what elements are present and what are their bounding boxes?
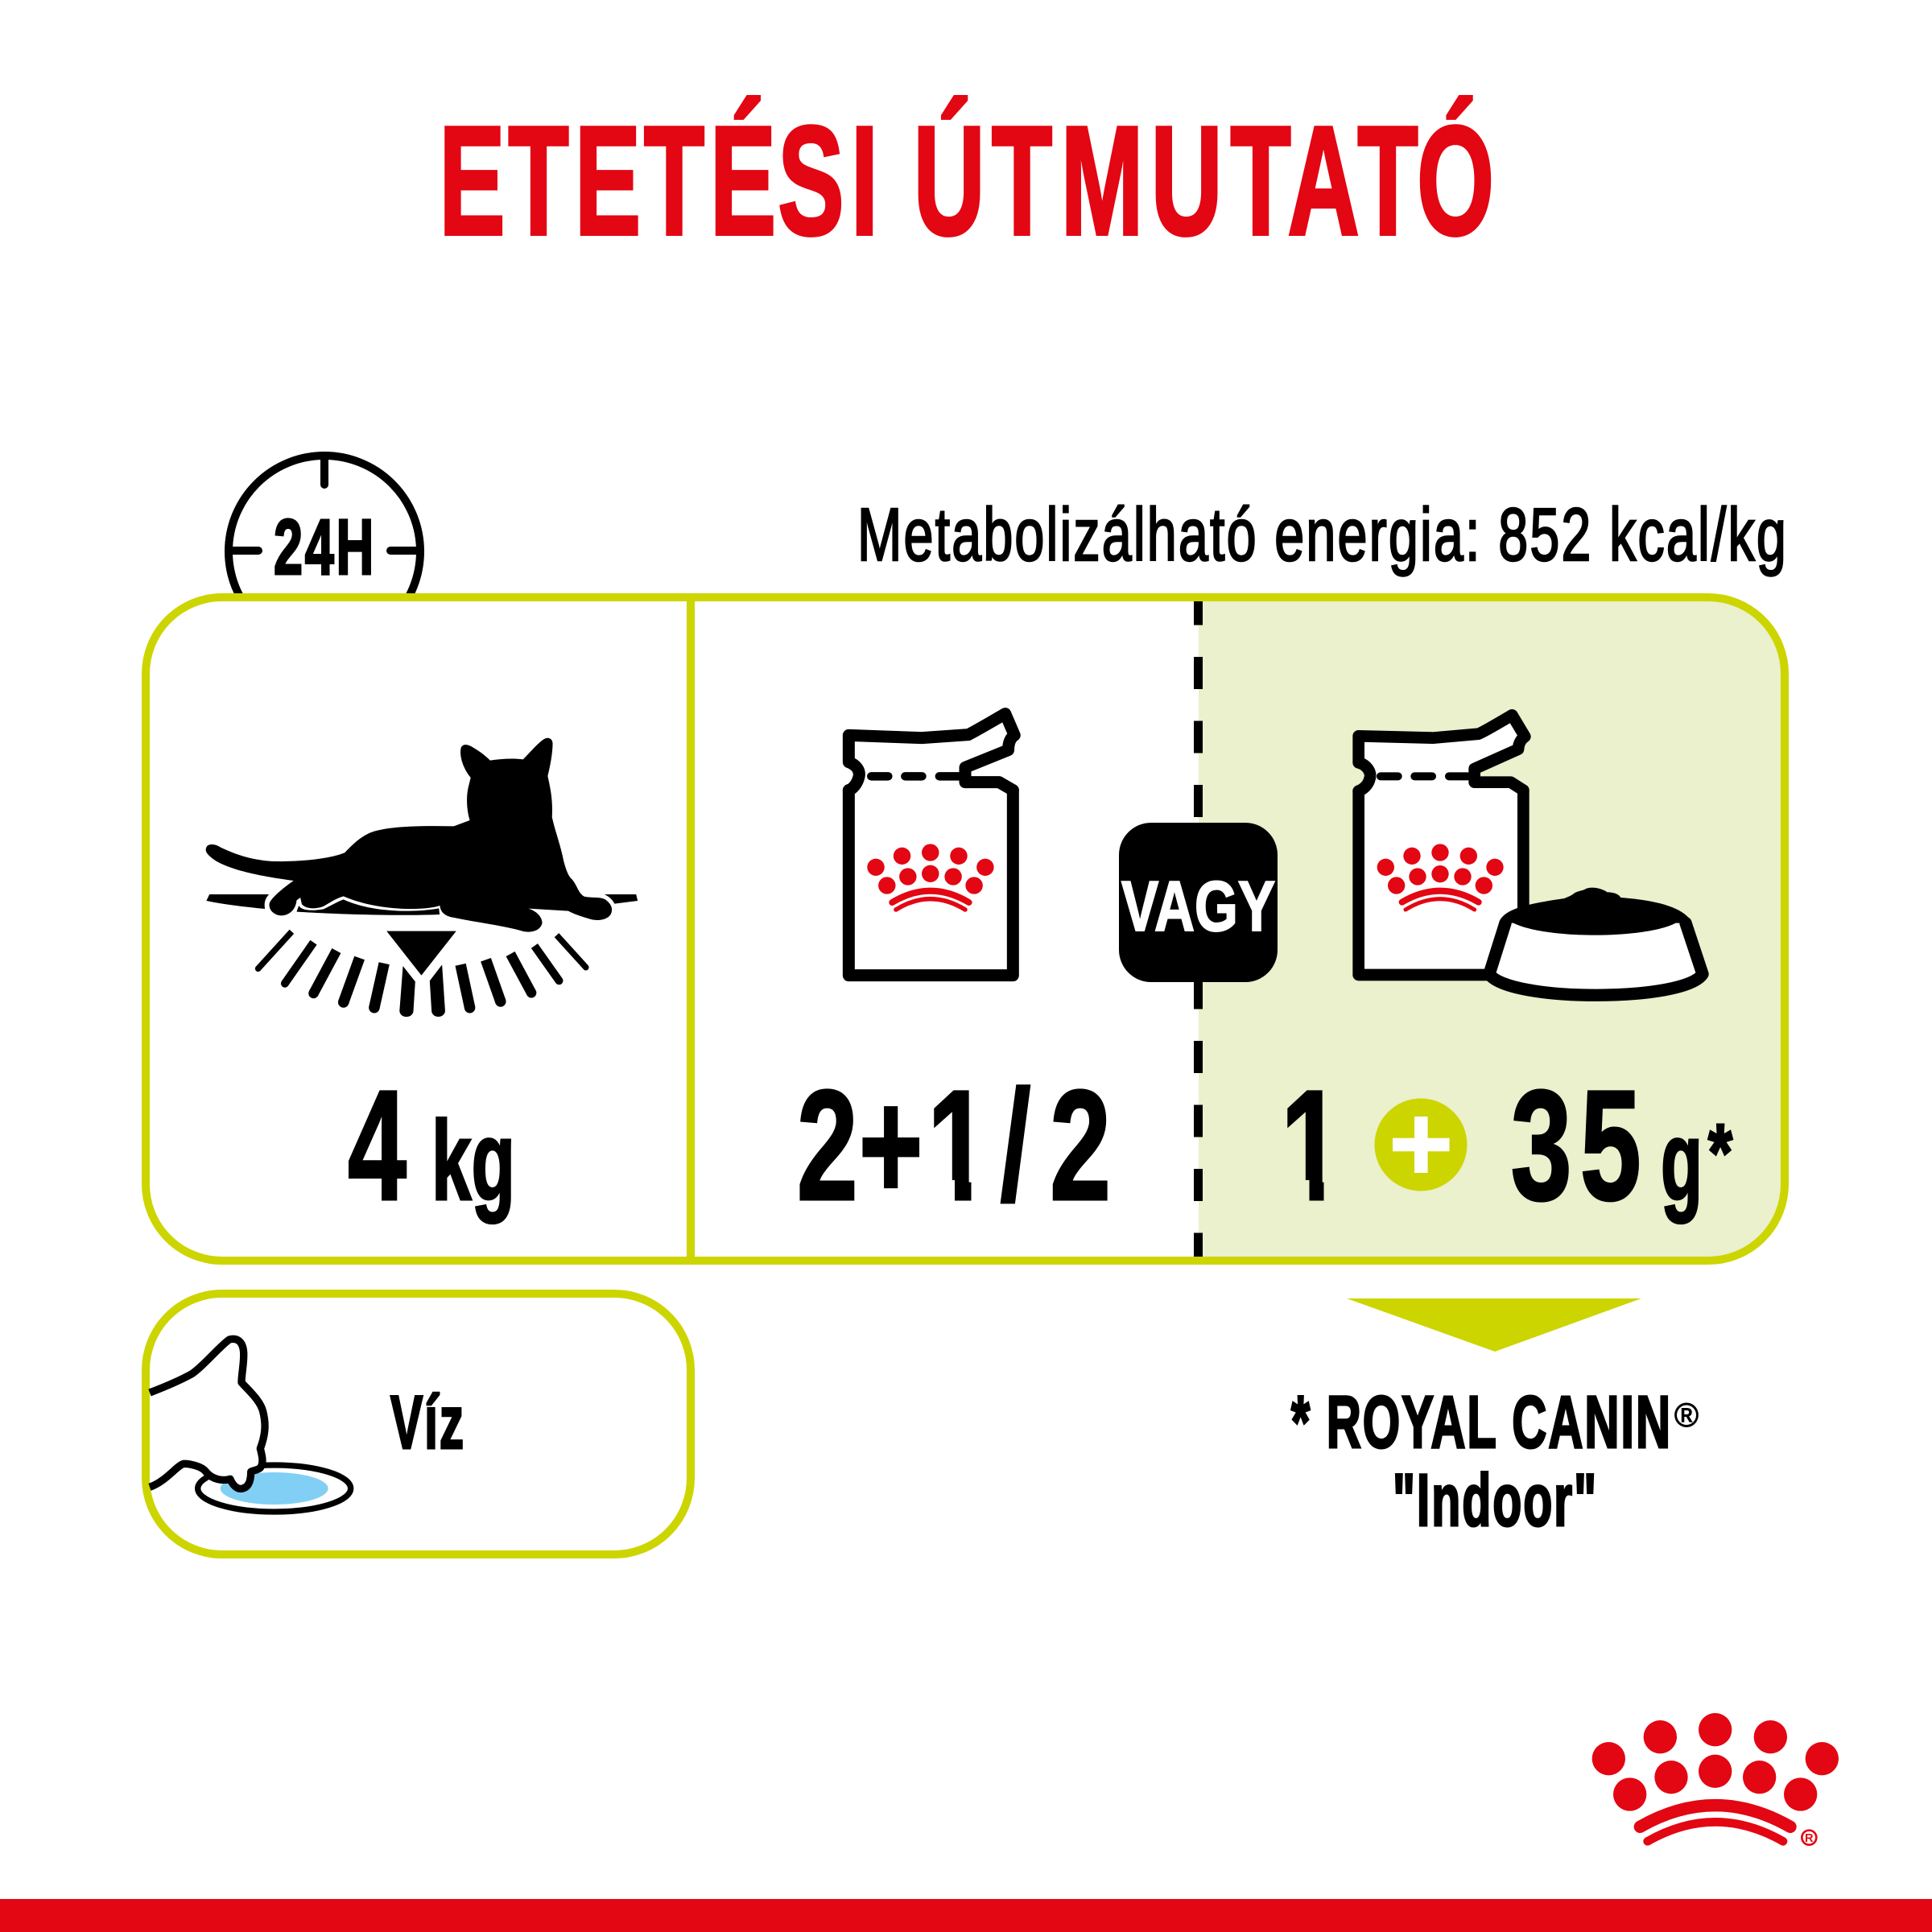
note: Royal Canin Indoor xyxy=(1291,1381,1699,1542)
amount: 2+1/2: 2+1/2 xyxy=(797,1058,1111,1233)
icon: crown logo on pouch xyxy=(867,844,994,910)
note: Royal Canin Indoor: "Indoor" xyxy=(1393,1459,1598,1542)
icon: crown logo on second pouch xyxy=(1377,844,1504,910)
icon: food bowl xyxy=(1489,888,1703,995)
amount: 35 g* xyxy=(1511,1058,1732,1233)
panel: feeding table xyxy=(146,597,1785,1261)
weight: 4 kg: kg xyxy=(431,1097,515,1224)
note: Royal Canin Indoor: ® xyxy=(1674,1396,1699,1434)
logo: Royal Canin crown xyxy=(1592,1713,1839,1845)
amount: 35 g*: 35 xyxy=(1511,1058,1641,1233)
amount: 35 g*: * xyxy=(1708,1108,1732,1198)
icon: 24H clock: 24H xyxy=(274,503,376,591)
panel: water xyxy=(146,1294,691,1554)
dashed divider xyxy=(1194,601,1203,1257)
icon: plus circle xyxy=(1375,1098,1467,1191)
column divider xyxy=(687,597,695,1261)
amount: 1 pouch: 1 xyxy=(1281,1058,1342,1233)
note: Royal Canin Indoor: * ROYAL CANIN xyxy=(1291,1381,1672,1463)
logo: Royal Canin crown: R xyxy=(1805,1832,1814,1845)
amount: 35 g*: g xyxy=(1661,1097,1703,1224)
icon: 24H clock xyxy=(229,456,420,647)
arrow: pointing to note xyxy=(1347,1298,1641,1352)
weight: 4 kg: 4 xyxy=(348,1058,407,1233)
badge: VAGY xyxy=(1119,823,1278,982)
panel border xyxy=(146,597,1785,1261)
icon: cat drinking water xyxy=(150,1339,351,1512)
icon: lying cat on scale xyxy=(206,738,638,1017)
weight: 4 kg xyxy=(348,1058,515,1233)
badge: VAGY: VAGY xyxy=(1121,866,1275,946)
icon: pouch and bowl xyxy=(1359,715,1703,995)
icon: pouch xyxy=(848,714,1014,976)
water label: Víz xyxy=(390,1380,465,1464)
title: ETETÉSI ÚTMUTATÓ xyxy=(439,94,1494,268)
panel: wet and dry food background xyxy=(1199,597,1785,1261)
footer bar xyxy=(0,1899,1932,1932)
